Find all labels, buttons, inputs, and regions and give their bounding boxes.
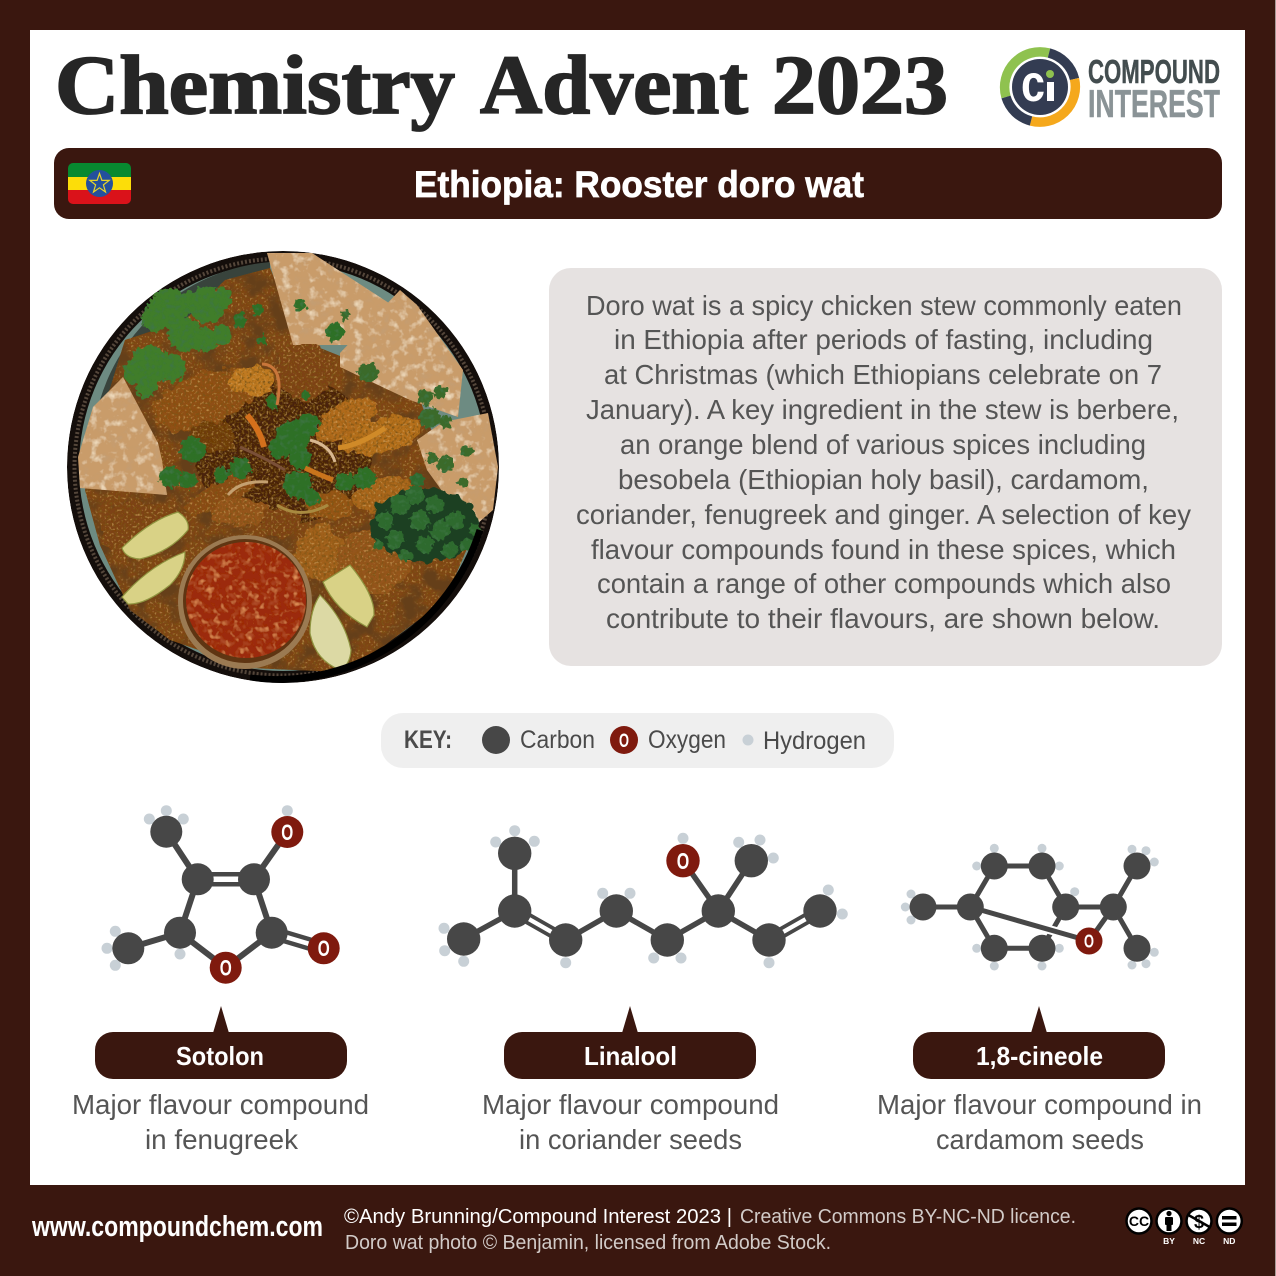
label: 1,8-cineole [913, 1006, 1165, 1079]
description text: in Ethiopia after periods of fasting, including [614, 324, 1153, 355]
label: Linalool [504, 1006, 756, 1079]
footer website: www.compoundchem.com [31, 1211, 323, 1243]
caption: Linalool [482, 1089, 779, 1155]
caption: 1,8-cineole: Major flavour compound in [877, 1089, 1202, 1120]
description text: contribute to their flavours, are shown below. [606, 603, 1160, 634]
molecule: linalool: O [677, 848, 689, 874]
description text: contain a range of other compounds which also [597, 568, 1171, 599]
title: Chemistry [55, 39, 455, 132]
description text: besobela (Ethiopian holy basil), cardamom, [618, 464, 1149, 495]
icon: NC: $ [1194, 1212, 1204, 1232]
icon: BY: BY [1163, 1236, 1175, 1246]
description text: coriander, fenugreek and ginger. A selection of key [576, 499, 1191, 530]
logo wordmark bottom: INTEREST [1088, 83, 1220, 126]
caption: 1,8-cineole: cardamom seeds [936, 1124, 1144, 1155]
icon: ND: ND [1223, 1236, 1235, 1246]
footer credits [344, 1205, 1076, 1254]
caption: Linalool: in coriander seeds [519, 1124, 742, 1155]
photo: doro wat platter [60, 250, 510, 690]
caption: 1,8-cineole [877, 1089, 1202, 1155]
herbs [123, 287, 473, 506]
caption: Sotolon [72, 1089, 369, 1155]
molecule: 1,8-cineole [901, 844, 1159, 970]
description text: at Christmas (which Ethiopians celebrate on 7 [604, 359, 1162, 390]
label: Sotolon [95, 1006, 347, 1079]
logo letters: c [1021, 55, 1045, 113]
key: carbon [482, 726, 595, 754]
label: Sotolon: Sotolon [176, 1041, 264, 1071]
title: 2023 [772, 39, 948, 132]
panel: description [549, 268, 1222, 666]
molecule: linalool [438, 825, 848, 968]
molecule: sotolon: O [220, 956, 232, 980]
banner heading: Ethiopia: Rooster doro wat [414, 164, 864, 205]
icon: NC [1186, 1208, 1212, 1246]
footer credits: Creative Commons BY-NC-ND licence. [740, 1205, 1076, 1228]
lime wedges [122, 512, 374, 670]
molecule: sotolon: O [318, 936, 330, 961]
description text: an orange blend of various spices including [620, 429, 1146, 460]
footer credits: Doro wat photo © Benjamin, licensed from Adobe Stock. [345, 1231, 831, 1254]
molecule: sotolon: O [281, 820, 293, 845]
sauce bowl [178, 535, 312, 669]
footer credits: ©Andy Brunning/Compound Interest 2023 | [344, 1205, 732, 1228]
icon: Ethiopian flag [68, 163, 131, 204]
icon: CC: CC [1129, 1213, 1149, 1229]
icon: NC: NC [1193, 1236, 1205, 1246]
key label: KEY: [404, 726, 452, 754]
caption: Sotolon: Major flavour compound [72, 1089, 369, 1120]
key: oxygen: O [619, 731, 629, 752]
title [55, 39, 948, 132]
molecule: 1,8-cineole: O [1084, 932, 1094, 952]
key: oxygen [610, 726, 726, 754]
key: hydrogen: Hydrogen [763, 727, 866, 755]
banner [54, 148, 1222, 219]
label: 1,8-cineole: 1,8-cineole [976, 1041, 1103, 1071]
description text: January). A key ingredient in the stew is berbere, [586, 394, 1179, 425]
logo: Compound Interest [1005, 52, 1220, 126]
molecule: sotolon [102, 805, 340, 984]
key [381, 713, 894, 768]
logo ring [1005, 52, 1075, 122]
description text: Doro wat is a spicy chicken stew commonly eaten [586, 290, 1182, 321]
description text [576, 290, 1191, 634]
key: oxygen: Oxygen [648, 726, 726, 754]
caption: Linalool: Major flavour compound [482, 1089, 779, 1120]
icon: Creative Commons badges [1126, 1208, 1242, 1246]
key: carbon: Carbon [520, 726, 595, 754]
title: Advent [480, 39, 748, 132]
onion rings [228, 364, 385, 512]
description text: flavour compounds found in these spices, which [591, 534, 1176, 565]
caption: Sotolon: in fenugreek [145, 1124, 299, 1155]
label: Linalool: Linalool [584, 1041, 677, 1071]
